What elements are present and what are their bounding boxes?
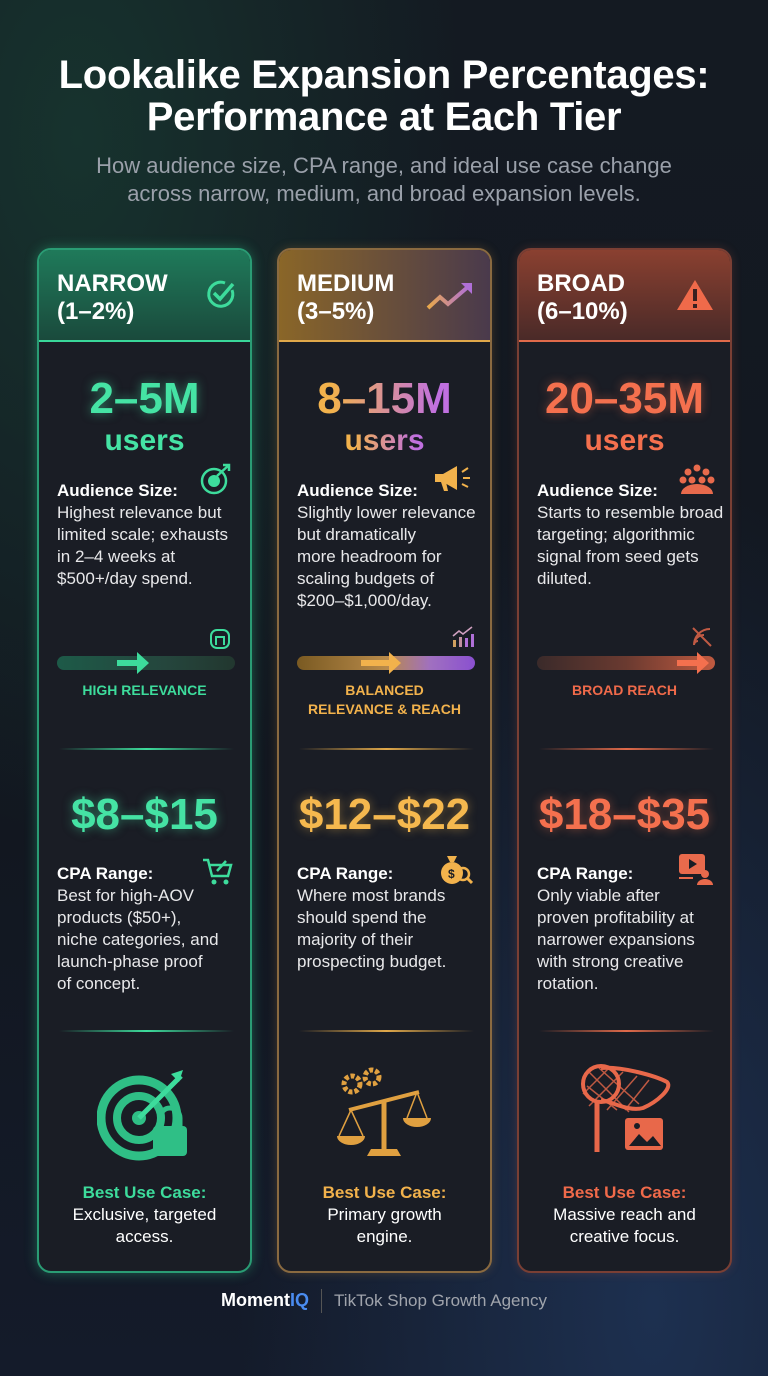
- panel: narrow: Best Use Case:: [83, 1183, 206, 1202]
- title: [59, 53, 709, 139]
- panel: broad: Only viable after: [537, 886, 660, 905]
- audience label: Audience Size:: [57, 481, 178, 500]
- panel: broad: Best Use Case:: [563, 1183, 686, 1202]
- panel: medium: RELEVANCE & REACH: [308, 701, 461, 717]
- icon: crowd: [680, 464, 714, 494]
- panel: broad: targeting; algorithmic: [537, 525, 695, 544]
- header: medium: (3–5%): [297, 298, 374, 325]
- header: narrow: NARROW: [57, 270, 168, 297]
- panel: medium: more headroom for: [297, 547, 442, 566]
- panel: medium: should spend the: [297, 908, 426, 927]
- icon: money bag: [441, 856, 473, 884]
- panel: medium: but dramatically: [297, 525, 416, 544]
- panel: narrow: [37, 248, 252, 1273]
- footer: MomentIQ TikTok Shop Growth Agency: [221, 1290, 547, 1310]
- header: broad: BROAD: [537, 270, 625, 297]
- panel: medium: prospecting budget.: [297, 952, 446, 971]
- panel: broad: with strong creative: [537, 952, 683, 971]
- header: medium: [279, 250, 490, 342]
- panel: narrow: Best for high-AOV: [57, 886, 194, 905]
- panel: broad: BROAD REACH: [572, 682, 677, 698]
- subtitle: [96, 153, 672, 206]
- panel: narrow: limited scale; exhausts: [57, 525, 228, 544]
- panel: broad: users: [584, 424, 665, 457]
- panel: narrow: Highest relevance but: [57, 503, 221, 522]
- header: narrow: [39, 250, 250, 342]
- panel: narrow: CPA Range:: [57, 864, 153, 883]
- title: Lookalike Expansion Percentages:: [59, 53, 709, 97]
- panel: medium: Where most brands: [297, 886, 445, 905]
- panel: medium: Primary growth: [327, 1205, 442, 1224]
- subtitle: How audience size, CPA range, and ideal use case change: [96, 153, 672, 178]
- big number: 8–15M: [317, 374, 452, 423]
- panel: broad: [517, 248, 732, 1273]
- broad bar: [537, 656, 715, 670]
- header: medium: MEDIUM: [297, 270, 394, 297]
- icon small: [210, 629, 230, 649]
- panel: medium: Best Use Case:: [323, 1183, 446, 1202]
- big number: 2–5M: [89, 374, 200, 423]
- panel: medium: CPA Range:: [297, 864, 393, 883]
- panel: broad: Audience Size:: [537, 481, 658, 500]
- relevance bar: [57, 656, 235, 670]
- icon: megaphone: [435, 466, 470, 491]
- icon: no signal: [692, 627, 712, 647]
- icon: audience target: [200, 464, 230, 494]
- panel: broad: CPA Range:: [537, 864, 633, 883]
- panel: broad: Starts to resemble broad: [537, 503, 723, 522]
- panel: narrow: in 2–4 weeks at: [57, 547, 175, 566]
- CPA number: $18–$35: [539, 790, 710, 839]
- panel: narrow: access.: [116, 1227, 173, 1246]
- icon: warning: [677, 280, 713, 310]
- panel: narrow: products ($50+),: [57, 908, 181, 927]
- big number: [279, 374, 490, 424]
- panel: medium: [277, 248, 492, 1273]
- panel: broad: diluted.: [537, 569, 592, 588]
- panel: medium: BALANCED: [345, 682, 424, 698]
- icon: money bag: $: [448, 867, 455, 881]
- icon: video person: [679, 854, 713, 885]
- icon: bar chart: [452, 626, 474, 647]
- panel: broad: rotation.: [537, 974, 598, 993]
- icon: check circle: [207, 280, 234, 308]
- icon: trend arrow: [426, 283, 472, 310]
- panel: narrow: HIGH RELEVANCE: [82, 682, 207, 698]
- icon: target lock: [97, 1070, 187, 1160]
- big number: 20–35M: [545, 374, 704, 423]
- panel: medium: users: [344, 424, 425, 457]
- panel: narrow: niche categories, and: [57, 930, 219, 949]
- title: Performance at Each Tier: [147, 95, 621, 139]
- panel: narrow: users: [104, 424, 185, 457]
- icon: net and image: [581, 1064, 670, 1152]
- panel: medium: scaling budgets of: [297, 569, 434, 588]
- header: narrow: (1–2%): [57, 298, 134, 325]
- panel: medium: engine.: [357, 1227, 412, 1246]
- panel: narrow: of concept.: [57, 974, 140, 993]
- icon: cart: [203, 858, 233, 884]
- header: broad: (6–10%): [537, 298, 628, 325]
- panel: narrow: launch-phase proof: [57, 952, 203, 971]
- panel: medium: majority of their: [297, 930, 413, 949]
- panel: narrow: $500+/day spend.: [57, 569, 193, 588]
- balanced bar: [297, 656, 475, 670]
- panel: medium: $200–$1,000/day.: [297, 591, 432, 610]
- panel: broad: narrower expansions: [537, 930, 695, 949]
- subtitle: across narrow, medium, and broad expansion levels.: [127, 181, 641, 206]
- panel: broad: proven profitability at: [537, 908, 694, 927]
- CPA number: $8–$15: [71, 790, 218, 839]
- panel: broad: signal from seed gets: [537, 547, 699, 566]
- panel: broad: creative focus.: [570, 1227, 679, 1246]
- panel: broad: Massive reach and: [553, 1205, 696, 1224]
- header: broad: [519, 250, 730, 342]
- panel: narrow: Exclusive, targeted: [73, 1205, 216, 1224]
- CPA number: $12–$22: [299, 790, 470, 839]
- panel: medium: Slightly lower relevance: [297, 503, 476, 522]
- panel: medium: Audience Size:: [297, 481, 418, 500]
- icon: scale with gears: [337, 1068, 431, 1156]
